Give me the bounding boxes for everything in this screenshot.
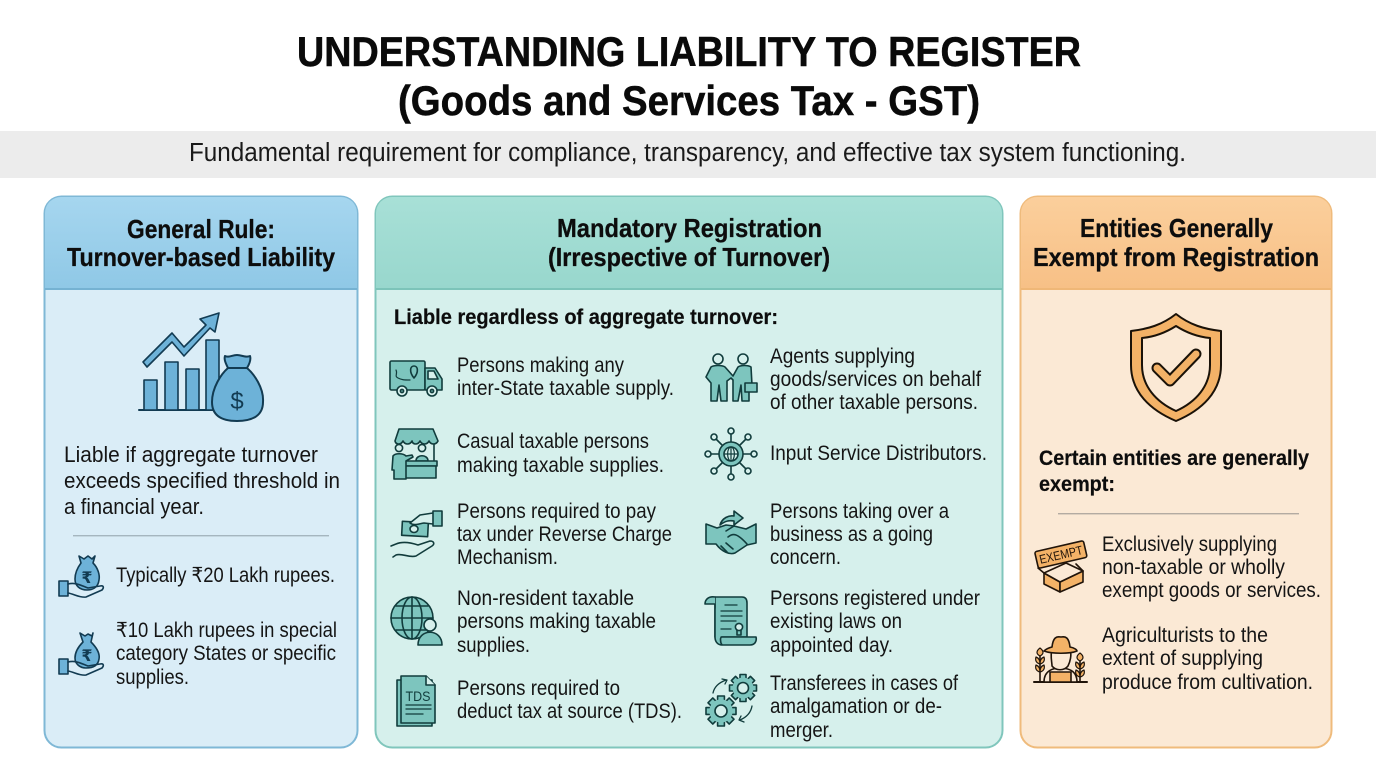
panel header: general rule: General Rule:: [127, 214, 275, 244]
icon: delivery truck: [390, 361, 442, 396]
text: casual taxable persons: making taxable supplies.: [457, 454, 664, 477]
text: inter-state supply: Persons making any: [457, 354, 625, 377]
text: agriculturists: produce from cultivation.: [1102, 671, 1313, 694]
text: special category threshold: supplies.: [116, 666, 189, 689]
text: inter-state supply: inter-State taxable supply.: [457, 377, 674, 400]
panel header: exempt entities: Exempt from Registration: [1033, 242, 1319, 272]
text: liability description: Liable if aggregate turnover: [64, 442, 318, 467]
panel: general rule: [44, 196, 358, 748]
text: TDS: Persons required to: [457, 677, 620, 700]
icon: distribution network: [705, 428, 757, 480]
subtitle band: Fundamental requirement for compliance, transparency, and effective tax system functioning.: [189, 139, 1186, 167]
text: non-resident persons: persons making taxable: [457, 610, 656, 633]
text: special category threshold: category States or specific: [116, 642, 336, 665]
text: special category threshold: ₹10 Lakh rupees in special: [116, 619, 337, 642]
text: liability description: exceeds specified threshold in: [64, 468, 340, 493]
text: transferees: amalgamation or de-: [770, 695, 942, 718]
icon: hand with rupee bag: [59, 556, 103, 597]
text: TDS: deduct tax at source (TDS).: [457, 700, 682, 723]
text: typical threshold: Typically ₹20 Lakh rupees.: [116, 564, 335, 587]
text: exclusively exempt supplies: exempt goods or services.: [1102, 579, 1321, 602]
text: transferees: merger.: [770, 719, 833, 742]
text: existing laws: [770, 587, 980, 657]
text: existing laws: appointed day.: [770, 634, 893, 657]
text: input service distributors: Input Service Distributors.: [770, 442, 987, 465]
icon: TDS document: [397, 676, 435, 726]
icon: scroll certificate: [705, 597, 756, 645]
text: transferees: Transferees in cases of: [770, 672, 958, 695]
panel header: mandatory registration: Mandatory Registration: [557, 213, 822, 243]
subtitle band: [0, 131, 1376, 178]
text: exempt lead-in: Certain entities are generally: [1039, 446, 1309, 470]
icon: shield with check: [1131, 314, 1221, 421]
text: non-resident persons: supplies.: [457, 634, 530, 657]
panel header: mandatory registration: (Irrespective of Turnover): [548, 242, 830, 272]
text: non-resident persons: [457, 587, 656, 657]
text: agents: Agents supplying: [770, 345, 915, 368]
panel header: general rule: Turnover-based Liability: [67, 242, 335, 272]
icon: market stall: [392, 429, 438, 479]
text: going concern: Persons taking over a: [770, 500, 949, 523]
text: agents: goods/services on behalf: [770, 368, 981, 391]
icon: hand with rupee bag special category: [59, 633, 103, 675]
text: existing laws: Persons registered under: [770, 587, 980, 610]
text: going concern: business as a going: [770, 523, 933, 546]
text: transferees: [770, 672, 958, 742]
text: existing laws: existing laws on: [770, 610, 902, 633]
icon: globe with person: [391, 597, 442, 645]
text: casual taxable persons: Casual taxable persons: [457, 430, 649, 453]
icon: exempt box: EXEMPT: [1038, 543, 1084, 567]
text: liability description: [64, 442, 340, 519]
text: exclusively exempt supplies: Exclusively supplying: [1102, 533, 1277, 556]
text: liability description: a financial year.: [64, 494, 204, 519]
icon: exempt box: [1035, 541, 1087, 592]
icon: gears with arrows: [706, 674, 756, 726]
text: reverse charge: Mechanism.: [457, 546, 558, 569]
panel: mandatory registration: [376, 196, 1002, 748]
text: non-resident persons: Non-resident taxable: [457, 587, 634, 610]
text: TDS: [457, 677, 682, 723]
icon: hand with rupee bag: ₹: [81, 570, 93, 587]
text: agriculturists: [1102, 624, 1313, 694]
text: special category threshold: [116, 619, 337, 689]
text: agents: [770, 345, 981, 414]
text: exempt lead-in: [1039, 446, 1309, 496]
panel header: general rule: [45, 197, 357, 290]
text: inter-state supply: [457, 354, 674, 400]
text: going concern: concern.: [770, 546, 841, 569]
panel header: exempt entities: Entities Generally: [1080, 213, 1273, 243]
text: exempt lead-in: exempt:: [1039, 472, 1115, 496]
text: reverse charge: Persons required to pay: [457, 500, 657, 523]
text: reverse charge: tax under Reverse Charge: [457, 523, 672, 546]
icon: handshake with arrow: [706, 511, 756, 554]
text: exclusively exempt supplies: non-taxable or wholly: [1102, 556, 1286, 579]
title: UNDERSTANDING LIABILITY TO REGISTER: [297, 28, 1081, 75]
text: casual taxable persons: [457, 430, 664, 477]
panel header: mandatory registration: [376, 197, 1002, 290]
icon: TDS document: TDS: [406, 689, 430, 704]
title: [297, 28, 1081, 124]
text: agents: of other taxable persons.: [770, 391, 978, 414]
panel header: exempt entities: [1021, 197, 1331, 290]
title: (Goods and Services Tax - GST): [398, 77, 980, 124]
icon: agents shaking hands: [706, 354, 757, 401]
icon: growth chart and money bag: [139, 313, 263, 421]
icon: growth chart and money bag: $: [230, 388, 244, 415]
text: reverse charge: [457, 500, 672, 569]
text: exclusively exempt supplies: [1102, 533, 1321, 602]
panel: exempt entities: [1020, 196, 1332, 748]
lead-in text: Liable regardless of aggregate turnover:: [394, 305, 778, 329]
icon: hand passing cash: [391, 511, 442, 557]
icon: farmer with wheat: [1034, 637, 1087, 682]
text: agriculturists: extent of supplying: [1102, 647, 1263, 670]
text: agriculturists: Agriculturists to the: [1102, 624, 1268, 647]
text: going concern: [770, 500, 949, 569]
icon: hand with rupee bag special category: ₹: [81, 648, 93, 665]
